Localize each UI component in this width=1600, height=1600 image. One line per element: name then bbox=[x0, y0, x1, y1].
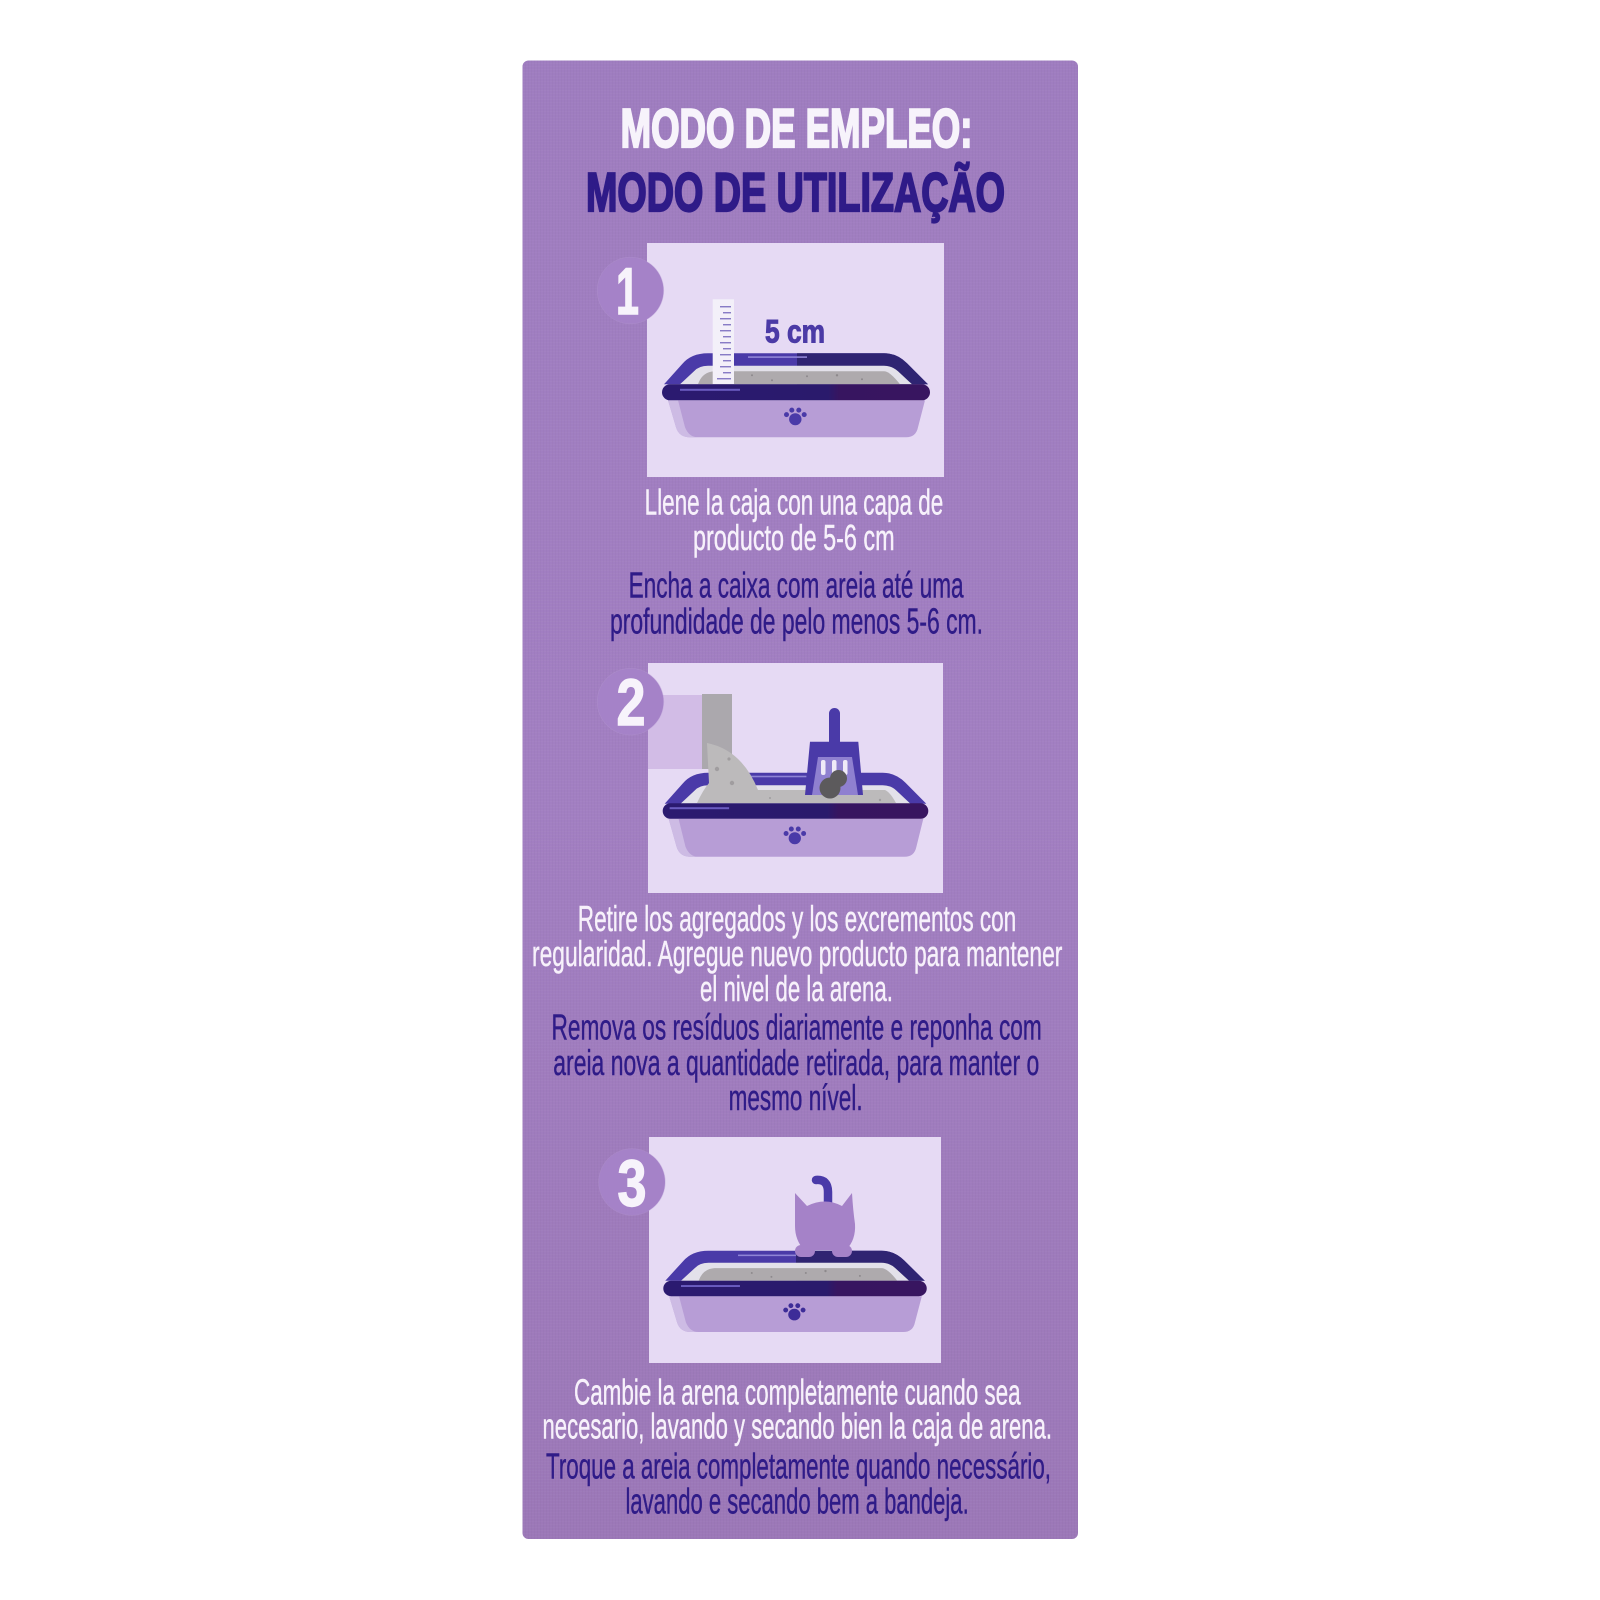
step number 3 bbox=[598, 1146, 666, 1220]
text block: step 2 Spanish bbox=[532, 898, 1062, 1009]
step number 3: 3 bbox=[618, 1146, 646, 1220]
text block: step 2 Portuguese: mesmo nível. bbox=[729, 1077, 863, 1118]
text block: step 1 Spanish: Llene la caja con una capa de bbox=[645, 481, 943, 522]
litter tray with ruler bbox=[662, 299, 930, 437]
text block: step 1 Portuguese: profundidade de pelo menos 5-6 cm. bbox=[610, 600, 983, 641]
panel: step 1 bbox=[597, 243, 944, 477]
text block: step 3 Spanish: Cambie la arena completamente cuando sea bbox=[574, 1371, 1021, 1412]
text block: step 1 Portuguese bbox=[610, 564, 983, 641]
text block: step 3 Spanish: necesario, lavando y secando bien la caja de arena. bbox=[542, 1406, 1052, 1447]
step number 2 bbox=[597, 665, 664, 739]
cat tail bbox=[816, 1180, 828, 1203]
heading: Portuguese: MODO DE UTILIZAÇÃO bbox=[586, 161, 1005, 223]
pouring litter bbox=[697, 743, 896, 803]
panel: background card bbox=[522, 60, 1078, 1539]
step number 1: 1 bbox=[616, 254, 639, 328]
title bbox=[586, 97, 1005, 223]
scoop bbox=[805, 708, 863, 798]
text block: step 2 Spanish: regularidad. Agregue nuevo producto para mantener bbox=[532, 933, 1062, 974]
illustration background bbox=[647, 243, 944, 477]
text block: step 2 Spanish: el nivel de la arena. bbox=[700, 968, 893, 1009]
step number 2: 2 bbox=[616, 665, 646, 739]
illustration background bbox=[648, 663, 943, 893]
text block: step 3 Portuguese: lavando e secando bem a bandeja. bbox=[626, 1480, 969, 1521]
text block: step 2 Spanish: Retire los agregados y los excrementos con bbox=[578, 898, 1016, 939]
text block: step 3 Spanish bbox=[542, 1371, 1052, 1447]
text block: step 2 Portuguese: Remova os resíduos diariamente e reponha com bbox=[552, 1006, 1042, 1048]
ruler bbox=[713, 299, 734, 384]
panel: step 3 bbox=[598, 1137, 941, 1363]
litter tray with scoop bbox=[663, 708, 928, 857]
text block: step 2 Portuguese bbox=[552, 1006, 1042, 1118]
panel: step 2 bbox=[597, 663, 943, 893]
step number 1 bbox=[597, 254, 664, 328]
litter tray bbox=[663, 1251, 927, 1332]
text block: step 2 Portuguese: areia nova a quantidade retirada, para manter o bbox=[553, 1042, 1039, 1083]
text block: step 1 Spanish bbox=[645, 481, 943, 558]
text block: step 1 Portuguese: Encha a caixa com areia até uma bbox=[629, 564, 964, 605]
measurement label: 5 cm bbox=[765, 314, 825, 350]
text block: step 3 Portuguese bbox=[546, 1446, 1051, 1521]
cat bbox=[795, 1193, 855, 1257]
litter bag bbox=[648, 694, 732, 769]
heading: Spanish: MODO DE EMPLEO: bbox=[621, 97, 972, 159]
text block: step 3 Portuguese: Troque a areia completamente quando necessário, bbox=[546, 1446, 1051, 1486]
text block: step 1 Spanish: producto de 5-6 cm bbox=[693, 517, 895, 558]
illustration background bbox=[649, 1137, 941, 1363]
